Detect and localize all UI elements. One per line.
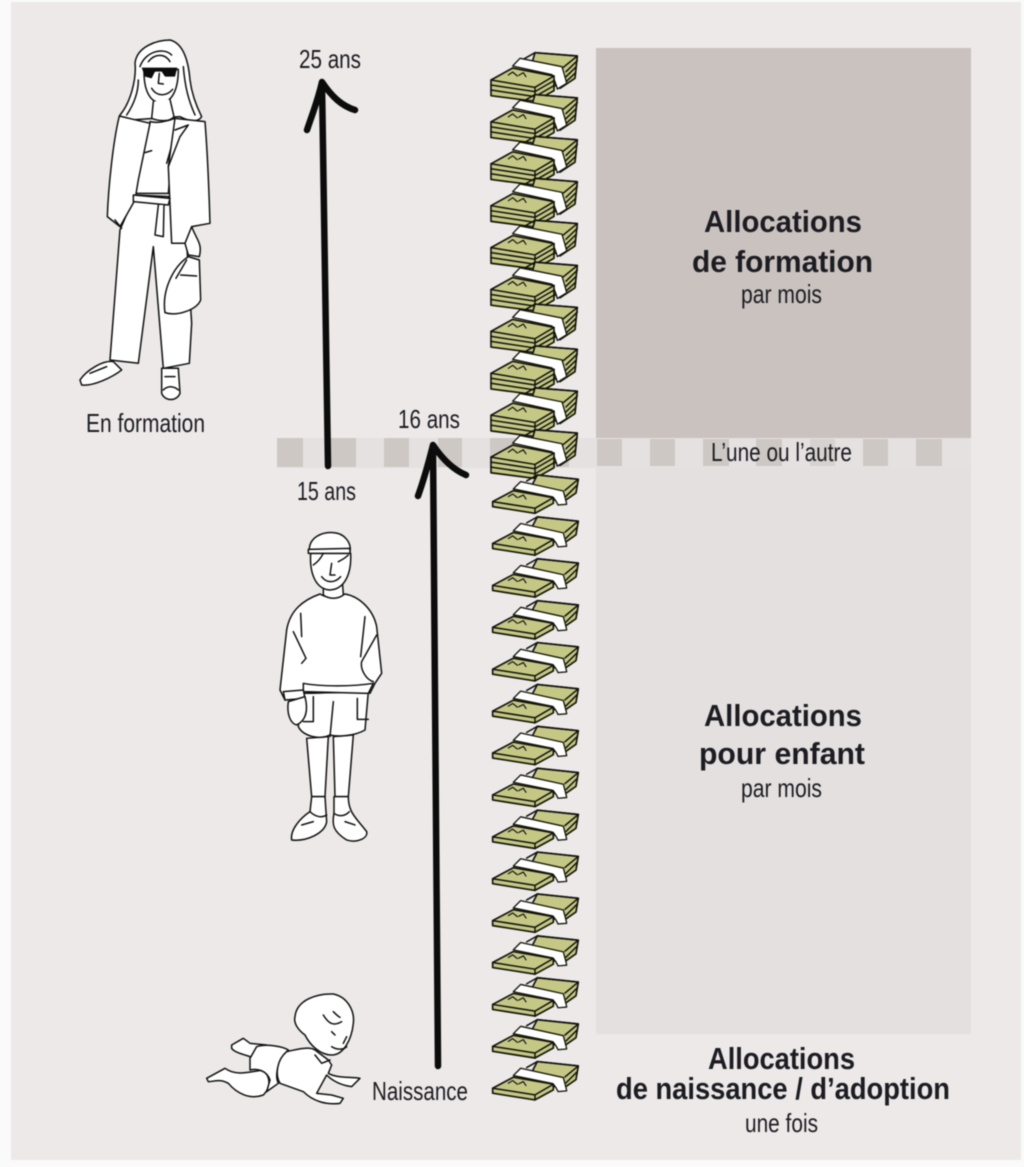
- icon: crawling baby: [207, 994, 360, 1104]
- panel: allocations pour enfant: [596, 467, 971, 1034]
- heading: allocations de naissance ou d'adoption: une fois: [745, 1108, 818, 1138]
- money stacks column: [491, 53, 578, 1100]
- heading: allocations pour enfant: par mois: [741, 773, 822, 803]
- arrow: birth to 16 years: [418, 445, 466, 1066]
- icon: young woman in training: [80, 40, 210, 400]
- heading: allocations de formation: de formation: [692, 244, 873, 279]
- arrow: 15 to 25 years: [307, 82, 355, 466]
- heading: allocations de formation: par mois: [741, 279, 822, 309]
- label: en formation: En formation: [86, 408, 205, 438]
- label: 15 ans: 15 ans: [297, 476, 356, 506]
- label: 25 ans: 25 ans: [299, 44, 361, 74]
- heading: allocations pour enfant: pour enfant: [699, 736, 865, 771]
- dashed band: overlap between the two allowances: [277, 438, 971, 468]
- icon: teenage boy: [280, 533, 382, 841]
- heading: allocations de naissance ou d'adoption: Allocations: [708, 1041, 855, 1076]
- label: l'une ou l'autre: L’une ou l’autre: [711, 437, 852, 467]
- heading: allocations de formation: Allocations: [704, 204, 862, 239]
- heading: allocations de naissance ou d'adoption: [616, 1041, 950, 1138]
- heading: allocations pour enfant: [699, 698, 865, 803]
- heading: allocations de formation: [692, 204, 873, 309]
- heading: allocations de naissance ou d'adoption: de naissance / d’adoption: [616, 1071, 950, 1106]
- panel: allocations de formation: [596, 48, 971, 439]
- label: naissance: Naissance: [372, 1076, 468, 1106]
- heading: allocations pour enfant: Allocations: [704, 698, 862, 733]
- label: 16 ans: 16 ans: [398, 404, 460, 434]
